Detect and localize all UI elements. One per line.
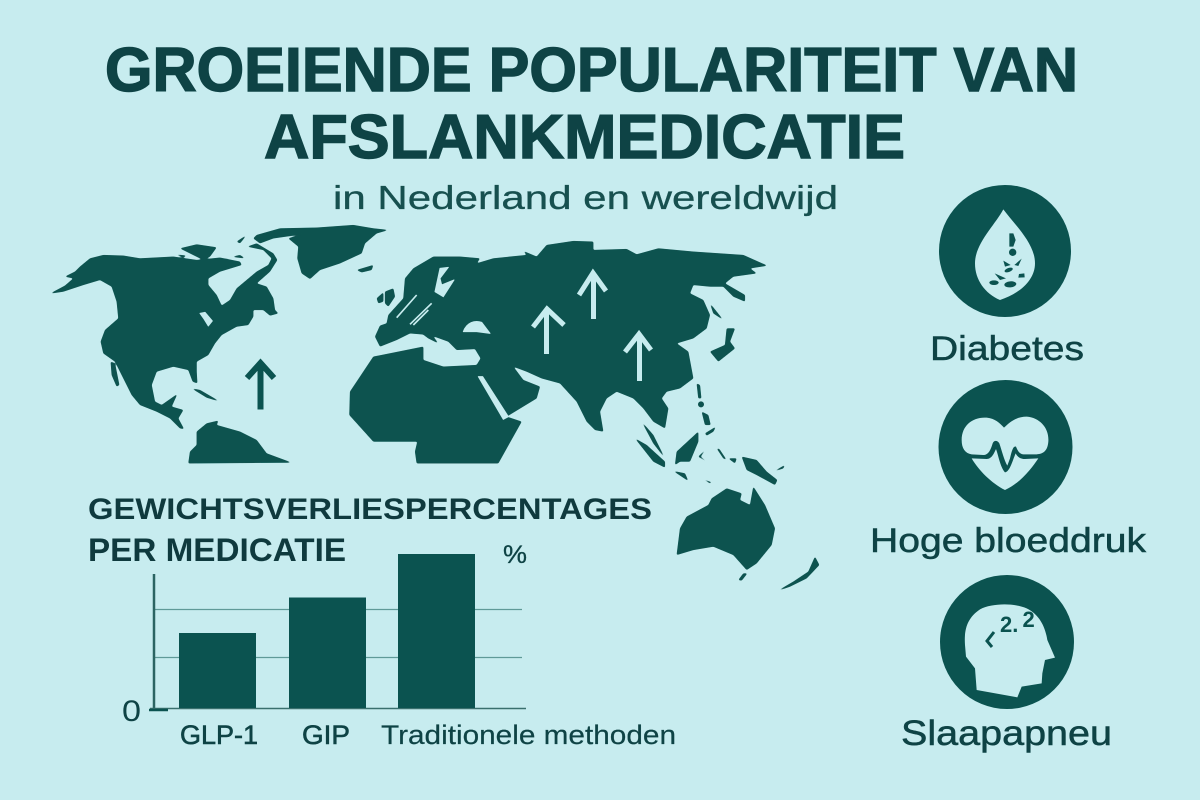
category label: GLP-1: GLP-1 bbox=[180, 720, 258, 750]
category label: GIP: GIP bbox=[302, 720, 350, 750]
percent unit label: % bbox=[503, 541, 527, 569]
label: Slaapapneu: Slaapapneu bbox=[901, 714, 1112, 753]
axis zero label: 0 bbox=[122, 695, 141, 728]
icon: head with sleep symbols bbox=[940, 575, 1074, 709]
world map bbox=[50, 225, 819, 591]
chart heading: GEWICHTSVERLIESPERCENTAGES bbox=[88, 493, 652, 526]
icon: dark up arrow over Atlantic bbox=[247, 362, 274, 410]
title: GROEIENDE POPULARITEIT VAN bbox=[105, 36, 1078, 105]
bar: Traditionele methoden bbox=[398, 554, 475, 708]
chart heading: PER MEDICATIE bbox=[88, 532, 346, 568]
icon: light up arrow east Asia bbox=[625, 334, 651, 381]
icon: head with sleep symbols: 2 bbox=[1022, 607, 1035, 632]
chart heading bbox=[88, 493, 652, 568]
category label: Traditionele methoden: Traditionele methoden bbox=[381, 720, 676, 750]
map: Eurasia, Africa, Oceania bbox=[349, 241, 819, 591]
label: Hoge bloeddruk: Hoge bloeddruk bbox=[870, 522, 1147, 560]
icon: heart with pulse bbox=[938, 380, 1072, 514]
bar: GIP bbox=[289, 598, 366, 708]
icon: head with sleep symbols: 2. bbox=[1000, 612, 1018, 637]
bar chart bbox=[122, 554, 676, 750]
label: Diabetes: Diabetes bbox=[930, 330, 1084, 368]
icon: light up arrow west Asia bbox=[533, 309, 564, 354]
subtitle: in Nederland en wereldwijd bbox=[333, 179, 838, 216]
icon: light up arrow north Asia bbox=[579, 273, 606, 319]
map: lakes, seas and inland water bbox=[200, 267, 508, 419]
title: AFSLANKMEDICATIE bbox=[264, 103, 905, 172]
bar: GLP-1 bbox=[179, 633, 256, 708]
map: Americas and Greenland bbox=[50, 225, 388, 463]
title bbox=[105, 36, 1078, 172]
icon: diabetes drop bbox=[939, 185, 1071, 317]
